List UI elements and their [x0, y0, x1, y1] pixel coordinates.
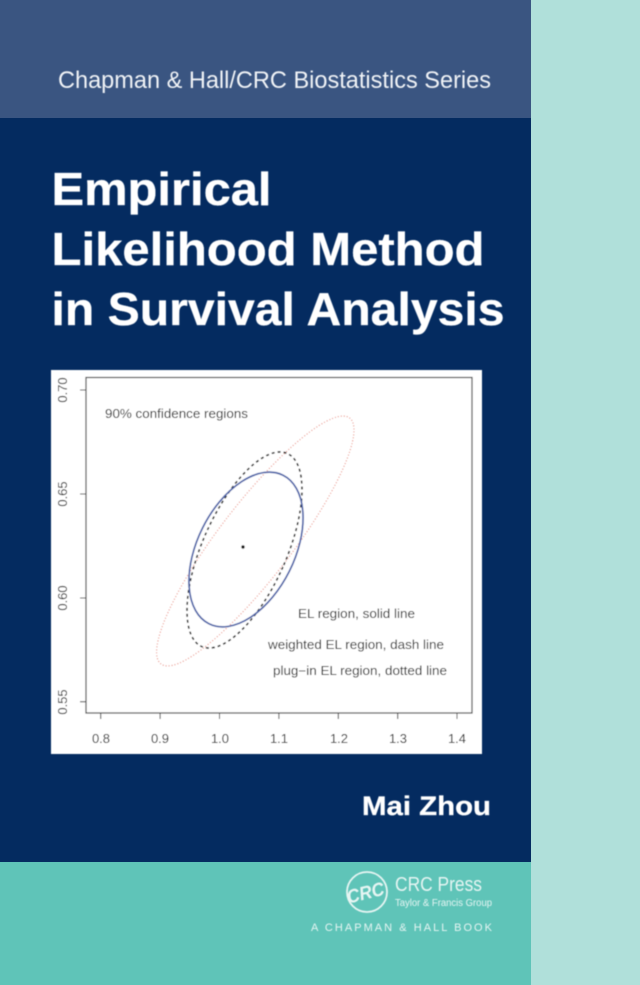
x axis labels: 1.4 [448, 731, 466, 746]
x axis labels: 1.0 [211, 731, 229, 746]
title [52, 163, 505, 335]
dashed ellipse: weighted EL region [163, 436, 326, 664]
annotation: confidence regions: 90% confidence regions [105, 407, 248, 421]
right side strip [531, 0, 640, 985]
annotation: dotted line: plug−in EL region, dotted line [273, 664, 447, 678]
y axis labels: 0.60 [55, 585, 70, 611]
dotted ellipse: plug-in EL region [132, 396, 379, 686]
y axis labels: 0.65 [55, 481, 70, 507]
y axis ticks [80, 390, 86, 702]
series band [0, 0, 531, 118]
x axis labels: 0.8 [92, 731, 110, 746]
author: Mai Zhou [362, 791, 491, 821]
y axis labels: 0.70 [55, 377, 70, 403]
publisher logo [311, 872, 493, 934]
x axis labels: 1.2 [330, 731, 348, 746]
title: Empirical [52, 163, 272, 215]
title: in Survival Analysis [52, 283, 505, 335]
plot frame [86, 378, 472, 713]
Taylor and Francis line: Taylor & Francis Group [395, 898, 492, 909]
series name: Chapman & Hall/CRC Biostatistics Series [58, 67, 491, 94]
title: Likelihood Method [52, 223, 484, 275]
x axis labels: 1.3 [389, 731, 407, 746]
navy cover panel [0, 118, 531, 862]
centre point [241, 545, 245, 549]
icon: CRC circle: CRC [345, 879, 387, 908]
publisher band [0, 862, 531, 985]
x axis ticks [101, 713, 457, 719]
chart panel: confidence regions [51, 370, 482, 754]
x axis labels [92, 731, 466, 746]
x axis labels: 0.9 [151, 731, 169, 746]
annotation: dash line: weighted EL region, dash line [267, 638, 444, 652]
imprint line: A CHAPMAN & HALL BOOK [311, 922, 493, 934]
solid ellipse: EL region [166, 454, 326, 645]
y axis labels [55, 377, 70, 715]
x axis labels: 1.1 [270, 731, 288, 746]
CRC Press name: CRC Press [395, 874, 482, 896]
y axis labels: 0.55 [55, 689, 70, 715]
annotation: solid line: EL region, solid line [298, 607, 415, 621]
